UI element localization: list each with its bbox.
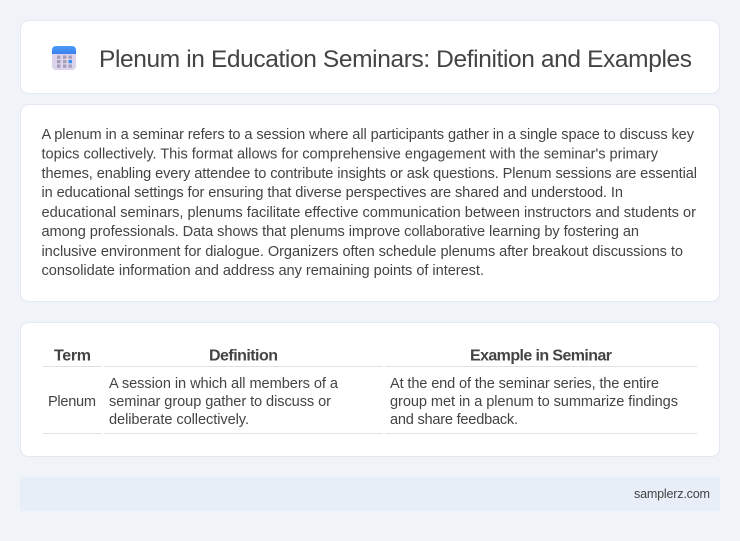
table cell: term: Plenum: [48, 394, 96, 410]
title: Plenum in Education Seminars: Definition and Examples: [99, 46, 692, 73]
table cell: example in seminar: and share feedback.: [390, 412, 518, 428]
panel: term table: [20, 322, 720, 456]
text block: plenum explanation: in educational settings for ensuring that diverse perspectives are shared and understood. In: [42, 185, 623, 201]
footer: samplerz.com: [634, 487, 710, 501]
text block: plenum explanation: themes, enabling every attendee to contribute insights or ask questions. Plenum sessions are essential: [42, 166, 697, 182]
text block: plenum explanation: [42, 127, 697, 279]
table cell: definition: A session in which all members of a: [109, 376, 339, 392]
text block: plenum explanation: educational seminars, plenums facilitate effective communication between instructors and students or: [42, 205, 696, 221]
table header row: [54, 348, 612, 364]
table header row: Example in Seminar: [470, 348, 612, 364]
table cell: example in seminar: At the end of the seminar series, the entire: [390, 376, 659, 392]
text block: plenum explanation: among professionals. Data shows that plenums improve collaborative learning by fostering an: [42, 224, 639, 240]
icon: calendar: [52, 46, 76, 70]
table cell: definition: [109, 376, 339, 428]
text block: plenum explanation: A plenum in a seminar refers to a session where all participants gather in a single space to discuss key: [42, 127, 695, 143]
table header row: Term: [54, 348, 91, 364]
text block: plenum explanation: topics collectively. This format allows for comprehensive engagement with the seminar's primary: [42, 146, 659, 162]
text block: plenum explanation: inclusive environment for dialogue. Organizers often schedule plenums after breakout discussions to: [42, 244, 683, 260]
table cell: example in seminar: [390, 376, 678, 428]
text block: plenum explanation: consolidate information and address any remaining points of interest.: [42, 263, 484, 279]
table cell: definition: deliberate collectively.: [109, 412, 249, 428]
panel: title header: [20, 20, 720, 94]
table header row: Definition: [209, 348, 278, 364]
table cell: definition: seminar group gather to discuss or: [109, 394, 331, 410]
panel: description: [20, 104, 720, 302]
table cell: example in seminar: group met in a plenum to summarize findings: [390, 394, 678, 410]
footer: [20, 477, 720, 511]
